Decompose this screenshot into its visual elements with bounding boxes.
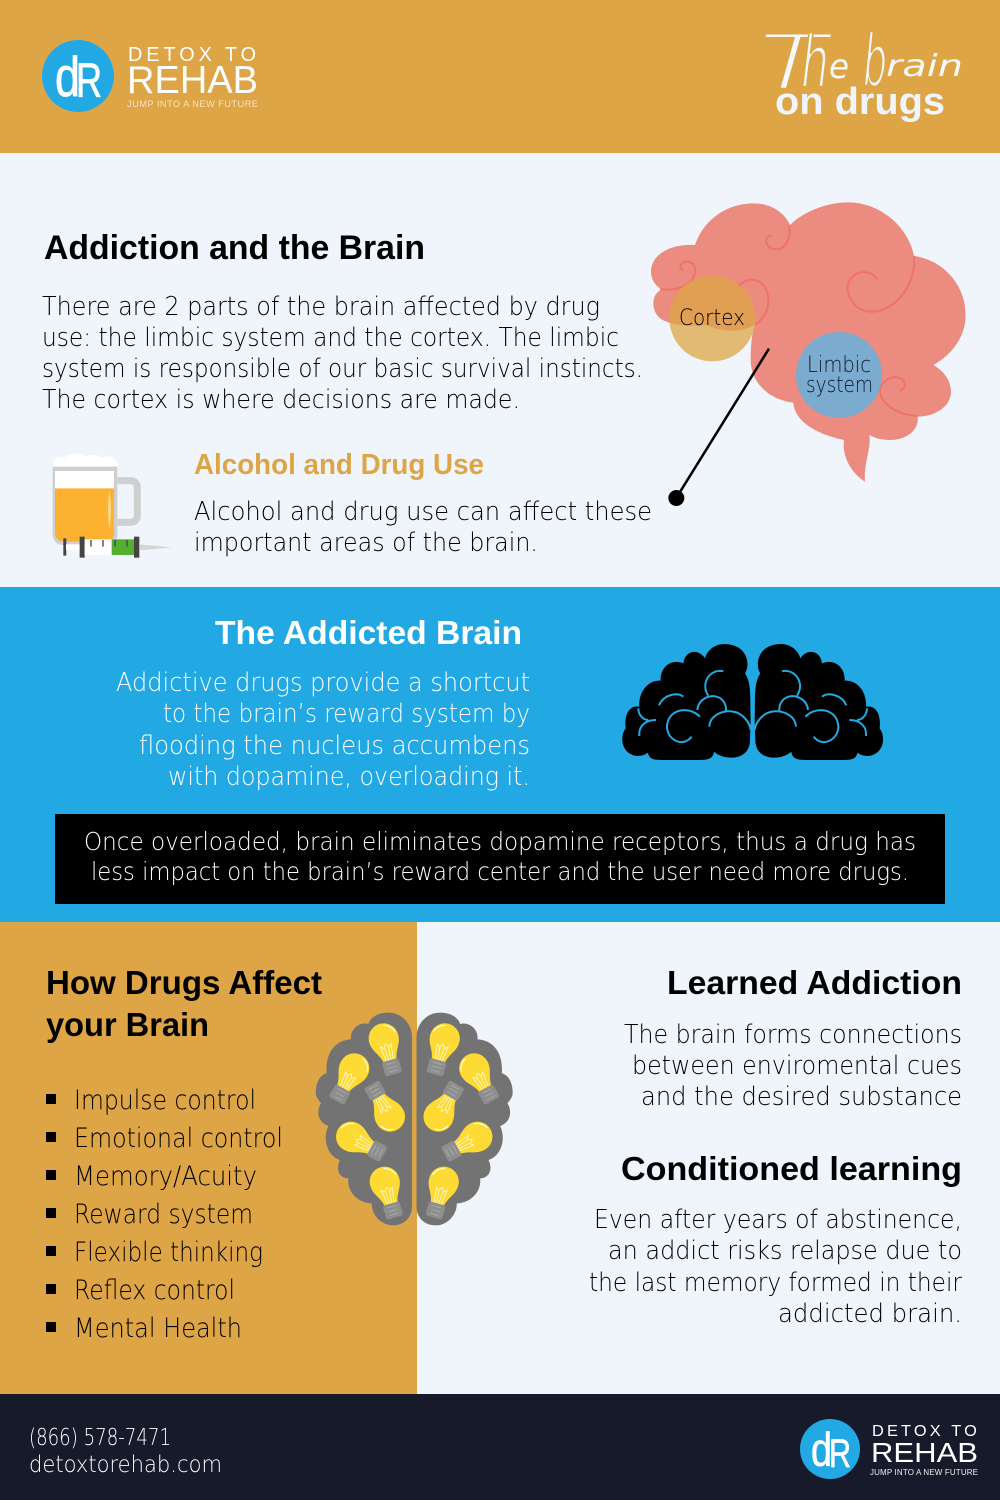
text block: conditioned learning: an addict risks relapse due to [608,1236,962,1266]
icon: light bulb brain [316,1013,513,1225]
heading: Alcohol and Drug Use: Alcohol and Drug Use [194,449,484,481]
text block: addictive drugs: Addictive drugs provide a shortcut [116,668,530,698]
text block: alcohol and drug use: Alcohol and drug use can affect these [194,497,652,527]
logo: Detox to Rehab footer [800,1419,980,1479]
text block: brain parts intro [42,292,643,415]
heading: How Drugs Affect your Brain: your Brain [46,1006,209,1043]
text block: addictive drugs [116,668,530,792]
limbic system marker [796,332,882,418]
contact details [29,1425,222,1478]
logo: Detox to Rehab: REHAB [127,59,258,102]
heading: How Drugs Affect your Brain [46,964,322,1043]
text block: learned addiction: between enviromental cues [632,1051,962,1081]
logo: Detox to Rehab: JUMP INTO A NEW FUTURE [127,99,258,109]
text block: addictive drugs: with dopamine, overloading it. [168,762,530,792]
callout: overloaded brain [55,814,945,904]
bullet list: affected functions: Reward system [74,1199,253,1230]
text block: addictive drugs: flooding the nucleus accumbens [139,731,530,761]
pointer line [668,349,769,506]
icon: beer mug and syringe [53,453,172,558]
text block: learned addiction [624,1020,962,1112]
title: The brain on drugs: on drugs [775,81,945,123]
label: Limbic system: Limbic [807,353,871,378]
heading: Learned Addiction: Learned Addiction [667,964,962,1001]
logo: Detox to Rehab [42,40,260,112]
text block: brain parts intro: system is responsible of our basic survival instincts. [42,354,643,384]
brain diagram [651,202,966,506]
logo: Detox to Rehab: d [55,45,80,108]
footer band [0,1394,1000,1500]
label: Limbic system: system [806,373,873,398]
heading: Addiction and the Brain: Addiction and the Brain [44,229,425,267]
bullet list: affected functions: Mental Health [74,1313,242,1344]
logo: Detox to Rehab footer: JUMP INTO A NEW FUTURE [870,1468,978,1477]
heading: How Drugs Affect your Brain: How Drugs Affect [46,964,322,1001]
text block: addictive drugs: to the brain’s reward system by [163,699,530,729]
text block: brain parts intro: The cortex is where decisions are made. [42,385,520,415]
panel: how drugs affect your brain [0,922,417,1394]
text block: conditioned learning [589,1205,962,1329]
callout: overloaded brain: Once overloaded, brain eliminates dopamine receptors, thus a drug has [84,827,916,856]
contact details: detoxtorehab.com [29,1452,222,1478]
title: The brain on drugs: b [863,19,887,103]
cortex marker [669,275,755,361]
label: Cortex: Cortex [679,306,745,331]
text block: conditioned learning: Even after years of abstinence, [594,1205,962,1235]
text block: learned addiction: The brain forms connections [624,1020,962,1050]
bullet list: affected functions: Impulse control [74,1085,256,1116]
logo: Detox to Rehab footer: DETOX TO [872,1423,980,1440]
logo: Detox to Rehab: DETOX TO [128,44,260,66]
logo: Detox to Rehab footer: REHAB [871,1437,978,1468]
title: The brain on drugs: T [757,19,835,109]
label: Limbic system [806,353,873,398]
title: The brain on drugs: e [829,47,849,87]
icon: black brain [622,644,883,760]
heading: The Addicted Brain: The Addicted Brain [215,614,522,651]
header band [0,0,1000,153]
bullet list: affected functions: Memory/Acuity [74,1161,257,1192]
brain folds [660,225,918,416]
panel: the addicted brain [0,587,1000,922]
text block: brain parts intro: There are 2 parts of the brain affected by drug [42,292,600,322]
text block: alcohol and drug use [194,497,652,558]
text block: brain parts intro: use: the limbic system and the cortex. The limbic [42,323,619,353]
logo: Detox to Rehab footer: d [811,1423,832,1476]
bullet list: affected functions: Flexible thinking [74,1237,263,1268]
logo: Detox to Rehab footer: R [829,1432,851,1476]
bullet list: affected functions: Emotional control [74,1123,283,1154]
title: The brain on drugs [757,19,963,123]
title: The brain on drugs: h [801,20,829,104]
brain shape [651,202,966,482]
text block: learned addiction: and the desired substance [641,1082,962,1112]
text block: alcohol and drug use: important areas of the brain. [194,528,538,558]
contact details: (866) 578-7471 [29,1425,171,1451]
text block: conditioned learning: addicted brain. [778,1299,962,1329]
bullet list: affected functions: Reflex control [74,1275,235,1306]
title: The brain on drugs: rain [886,49,963,84]
callout: overloaded brain: less impact on the brain’s reward center and the user need more drugs. [91,857,909,886]
logo: Detox to Rehab: R [76,55,102,108]
text block: conditioned learning: the last memory formed in their [589,1268,962,1298]
heading: Conditioned learning: Conditioned learning [621,1150,962,1187]
bullet list: affected functions [46,1085,283,1344]
